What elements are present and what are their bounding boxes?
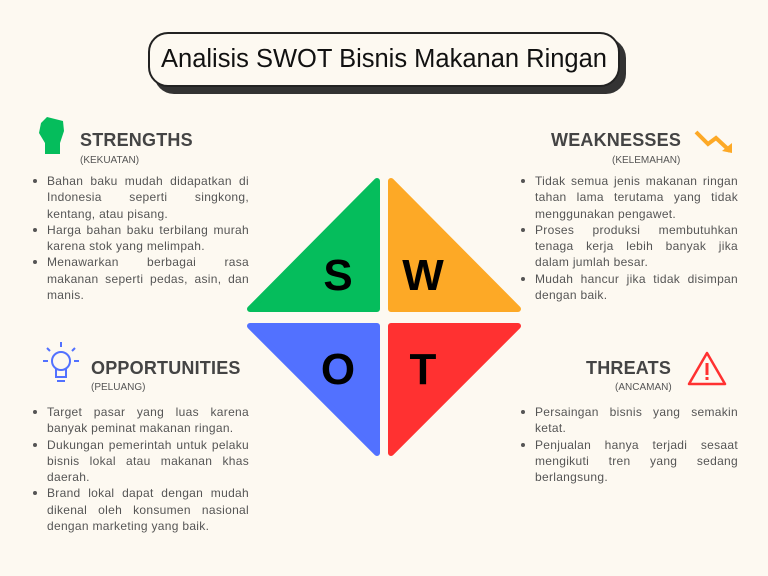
- icon: down arrow: [694, 130, 732, 153]
- swot diamond: T: [410, 345, 437, 394]
- list: opportunities: Target pasar yang luas karena banyak peminat makanan ringan.: [47, 405, 249, 435]
- list: threats: Persaingan bisnis yang semakin ketat.: [535, 405, 738, 435]
- title: Analisis SWOT Bisnis Makanan Ringan: [161, 45, 607, 73]
- list: opportunities: Dukungan pemerintah untuk pelaku bisnis lokal atau makanan khas daerah.: [47, 438, 249, 484]
- list: opportunities: [33, 405, 249, 533]
- list: strengths: Menawarkan berbagai rasa makanan seperti pedas, asin, dan manis.: [47, 255, 249, 302]
- list: strengths: [33, 174, 249, 302]
- title: [148, 32, 626, 94]
- list: opportunities: Brand lokal dapat dengan mudah dikenal oleh konsumen nasional dengan marketing yang baik.: [47, 486, 249, 533]
- icon: lightbulb: [43, 342, 79, 382]
- list: strengths: Bahan baku mudah didapatkan di Indonesia seperti singkong, kentang, atau pisang.: [47, 174, 249, 221]
- swot diamond: W: [402, 251, 444, 300]
- heading: threats: THREATS: [586, 358, 671, 378]
- text: (ANCAMAN): [615, 382, 672, 393]
- text: (PELUANG): [91, 382, 145, 393]
- text: (KELEMAHAN): [612, 155, 680, 166]
- list: threats: [521, 405, 738, 484]
- list: weaknesses: Tidak semua jenis makanan ringan tahan lama terutama yang tidak menggunakan pengawet.: [535, 174, 738, 221]
- list: weaknesses: [521, 174, 738, 302]
- icon: fist: [39, 117, 64, 154]
- heading: weaknesses: WEAKNESSES: [551, 130, 681, 150]
- list: weaknesses: Mudah hancur jika tidak disimpan dengan baik.: [535, 272, 738, 302]
- heading: strengths: STRENGTHS: [80, 130, 193, 150]
- list: threats: Penjualan hanya terjadi sesaat mengikuti tren yang sedang berlangsung.: [535, 438, 738, 484]
- list: weaknesses: Proses produksi membutuhkan tenaga kerja lebih banyak jika dalam jumlah besar.: [535, 223, 738, 269]
- text: (KEKUATAN): [80, 155, 139, 166]
- list: strengths: Harga bahan baku terbilang murah karena stok yang melimpah.: [47, 223, 249, 253]
- icon: warning: [688, 352, 726, 386]
- heading: opportunities: OPPORTUNITIES: [91, 358, 241, 378]
- swot diamond: O: [321, 345, 355, 394]
- swot diamond: S: [323, 251, 353, 300]
